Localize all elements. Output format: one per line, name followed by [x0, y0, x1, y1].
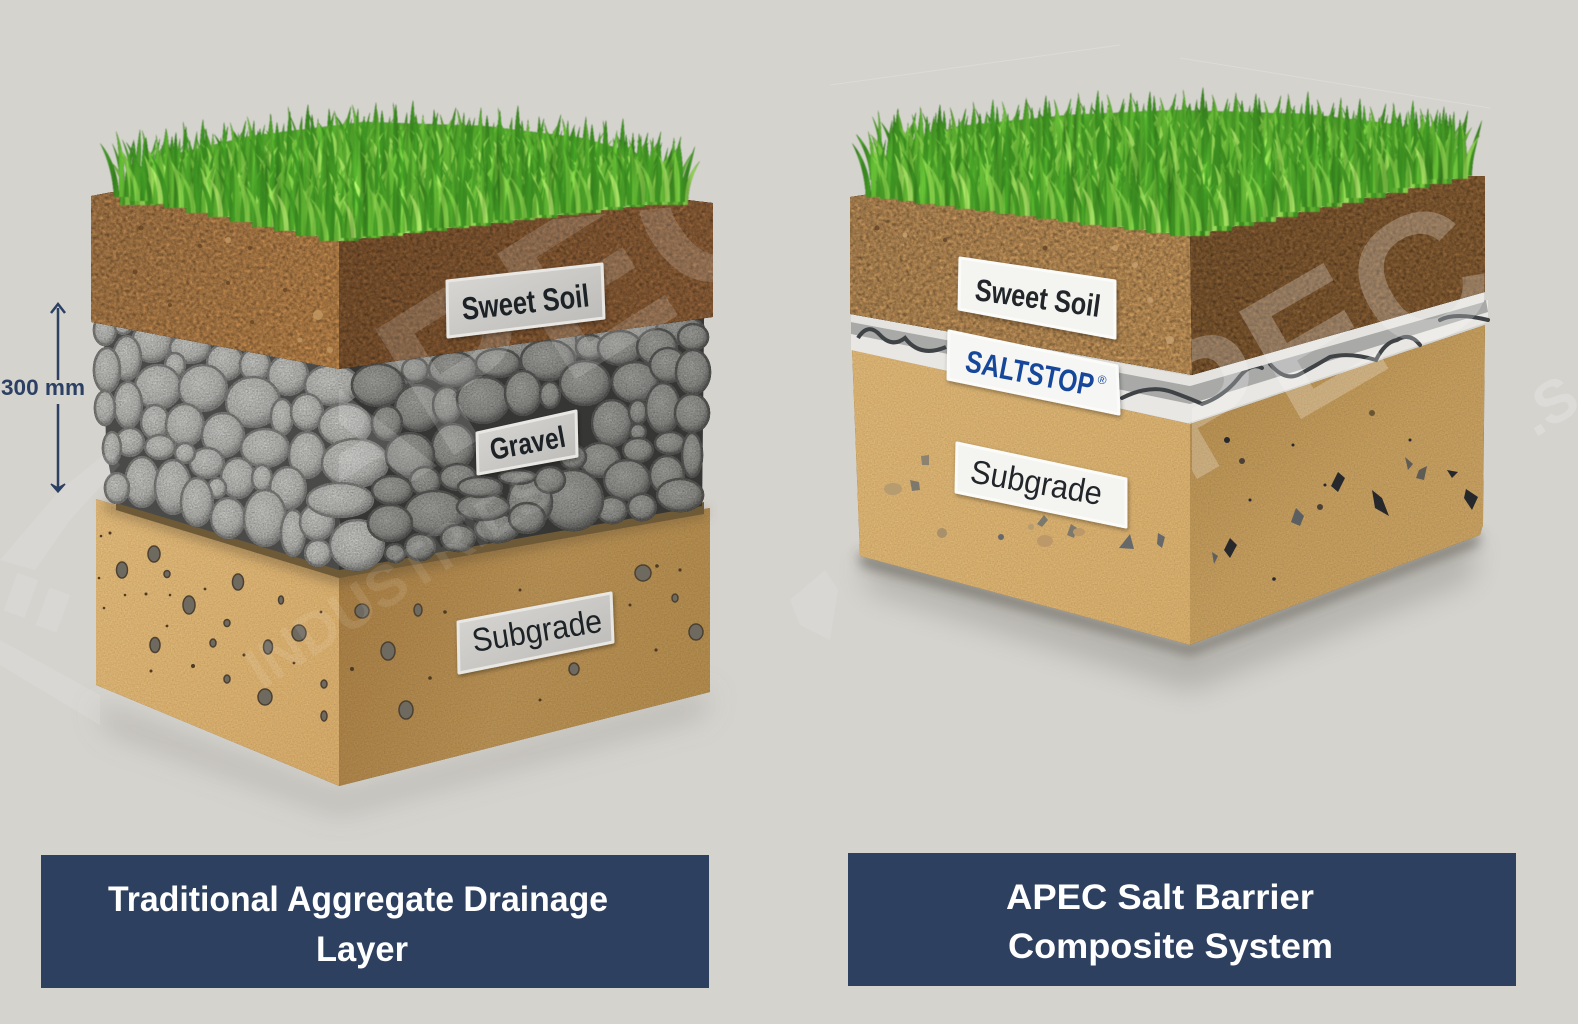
banner: APEC salt barrier composite system: APEC Salt Barrier: [1006, 878, 1314, 917]
sweet soil layer right: [850, 176, 1485, 375]
label: subgrade left: [458, 593, 613, 673]
label: subgrade right: Subgrade: [968, 452, 1105, 512]
label: sweet soil left: Sweet Soil: [460, 277, 591, 327]
ground shadow under right block: [858, 532, 1480, 690]
subgrade layer right: [852, 325, 1485, 645]
label: subgrade left: Subgrade: [469, 602, 604, 659]
ground shadow under left block: [95, 692, 712, 812]
watermark left: [103, 208, 713, 688]
gravel layer: [94, 315, 710, 570]
label: subgrade right: [956, 443, 1126, 527]
banner: APEC salt barrier composite system: Composite System: [1008, 927, 1333, 966]
watermark left: APEC: [207, 63, 841, 584]
label: saltstop: ®: [1096, 372, 1108, 388]
label: sweet soil right: Sweet Soil: [973, 272, 1103, 324]
label: saltstop: SALTSTOP: [963, 344, 1097, 403]
label: gravel: Gravel: [487, 421, 568, 467]
panel: traditional aggregate drainage cross-section: [2, 100, 713, 817]
label: saltstop: [948, 331, 1119, 414]
left face stones: [94, 315, 388, 570]
watermark right: APEC: [993, 160, 1527, 584]
grass left: [100, 100, 700, 241]
dimension arrow: 300 mm: [1, 304, 85, 492]
banner: traditional aggregate drainage layer: Layer: [316, 930, 408, 969]
subgrade layer left: [96, 498, 710, 786]
banner: traditional aggregate drainage layer: Traditional Aggregate Drainage: [108, 880, 608, 919]
watermark left: INDUSTRIES: [234, 455, 564, 701]
watermark right: [830, 45, 1576, 479]
panel: APEC salt barrier cross-section: [790, 45, 1578, 690]
saltstop membrane: [851, 292, 1488, 423]
label: sweet soil right: [959, 258, 1115, 338]
banner: traditional aggregate drainage layer: [41, 855, 709, 988]
right face stones: [352, 316, 710, 562]
sweet soil layer left: [91, 192, 713, 369]
grass right: [852, 87, 1482, 236]
label: sweet soil left: [447, 264, 604, 337]
label: gravel: [477, 411, 577, 474]
dimension arrow: 300 mm: 300 mm: [1, 375, 85, 400]
banner: APEC salt barrier composite system: [848, 853, 1516, 986]
